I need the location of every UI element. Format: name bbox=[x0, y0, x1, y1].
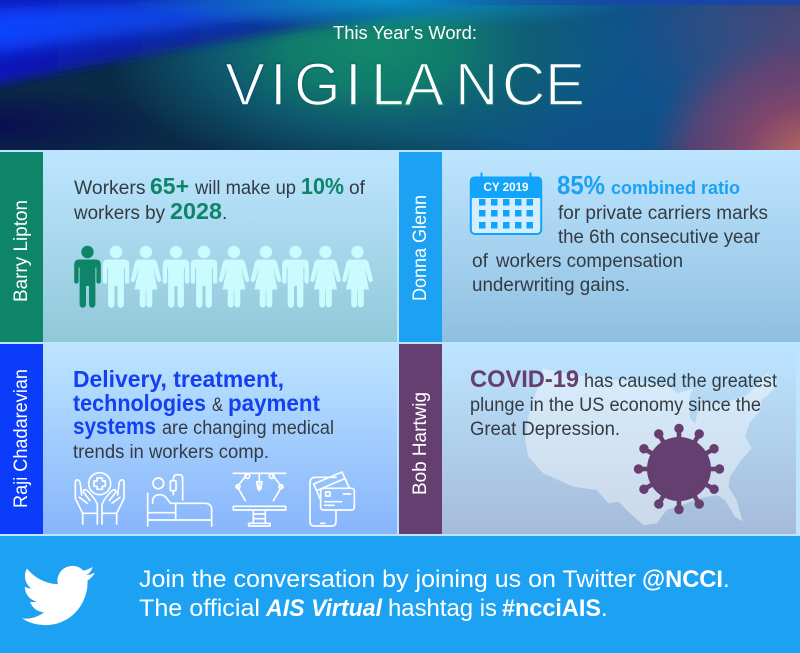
statement text: Delivery, treatment, bbox=[73, 366, 284, 392]
statement text: workers by bbox=[73, 203, 165, 224]
statement text: & bbox=[212, 395, 223, 416]
statement text: technologies bbox=[73, 390, 206, 416]
statement text bbox=[73, 173, 366, 224]
panel: Bob Hartwig bbox=[399, 344, 796, 534]
statement text bbox=[472, 170, 768, 296]
call to action text: hashtag is bbox=[388, 595, 497, 622]
footer band bbox=[0, 536, 800, 653]
speaker tab: Bob Hartwig bbox=[410, 392, 431, 495]
statement text: COVID-19 bbox=[470, 366, 579, 393]
speaker tab: Donna Glenn bbox=[410, 195, 431, 301]
statement text: the 6th consecutive year bbox=[558, 227, 761, 248]
speaker tab bbox=[399, 152, 442, 342]
statement text: for private carriers marks bbox=[558, 203, 768, 224]
statement text: Great Depression. bbox=[470, 419, 620, 440]
header banner bbox=[0, 0, 800, 150]
icon: phone and payment cards bbox=[310, 472, 354, 526]
statement text: will make up bbox=[194, 178, 296, 199]
panel: Donna Glenn bbox=[399, 152, 800, 342]
statement text: payment bbox=[228, 390, 320, 416]
header title bbox=[225, 23, 585, 118]
speaker tab bbox=[0, 152, 43, 342]
statement text: . bbox=[222, 203, 227, 224]
call to action text: Join the conversation by joining us on Twitter bbox=[139, 566, 636, 593]
statement text: has caused the greatest bbox=[584, 371, 778, 392]
statement text bbox=[73, 366, 334, 463]
icon: calendar: CY 2019 bbox=[484, 182, 528, 194]
icon: surgical robot bbox=[233, 473, 286, 526]
statement text: underwriting gains. bbox=[472, 275, 630, 296]
icon: Twitter bird bbox=[22, 566, 95, 625]
call to action text: @NCCI bbox=[642, 566, 723, 593]
panel: Barry Lipton bbox=[0, 152, 397, 342]
statement text: plunge in the US economy since the bbox=[470, 395, 761, 416]
statement text: systems bbox=[73, 413, 156, 439]
call to action text: . bbox=[601, 595, 608, 622]
statement text: Workers bbox=[74, 178, 146, 199]
call to action text bbox=[139, 566, 730, 622]
statement text bbox=[470, 366, 778, 440]
speaker tab bbox=[0, 344, 43, 534]
kicker text: This Year’s Word: bbox=[333, 23, 477, 43]
speaker tab: Raji Chadarevian bbox=[11, 369, 32, 508]
call to action text: The official bbox=[139, 595, 260, 622]
statement text: are changing medical bbox=[162, 418, 334, 439]
statement text: of bbox=[349, 178, 366, 199]
statement text: 2028 bbox=[170, 198, 222, 224]
statement text: of bbox=[472, 251, 489, 272]
statement text: 85% bbox=[557, 170, 605, 200]
pictogram: one in ten workers bbox=[74, 246, 373, 308]
statement text: combined ratio bbox=[611, 177, 740, 198]
call to action text: AIS Virtual bbox=[265, 595, 383, 622]
icon: coronavirus bbox=[634, 424, 724, 514]
speaker tab bbox=[399, 344, 442, 534]
speaker tab: Barry Lipton bbox=[11, 200, 32, 302]
call to action text: . bbox=[723, 566, 730, 593]
panel: Raji Chadarevian bbox=[0, 344, 397, 534]
icon: patient in hospital bed bbox=[148, 475, 212, 526]
call to action text: #ncciAIS bbox=[502, 595, 601, 622]
main word: VIGILANCE bbox=[225, 51, 585, 118]
icon: hands holding medical cross bbox=[75, 473, 124, 524]
icons row bbox=[75, 472, 354, 526]
map: United States silhouette bbox=[525, 368, 777, 525]
icon: calendar bbox=[470, 172, 542, 234]
statement text: trends in workers comp. bbox=[73, 442, 269, 463]
statement text: workers compensation bbox=[495, 251, 683, 272]
statement text: 65+ bbox=[150, 173, 189, 199]
statement text: 10% bbox=[301, 173, 344, 199]
